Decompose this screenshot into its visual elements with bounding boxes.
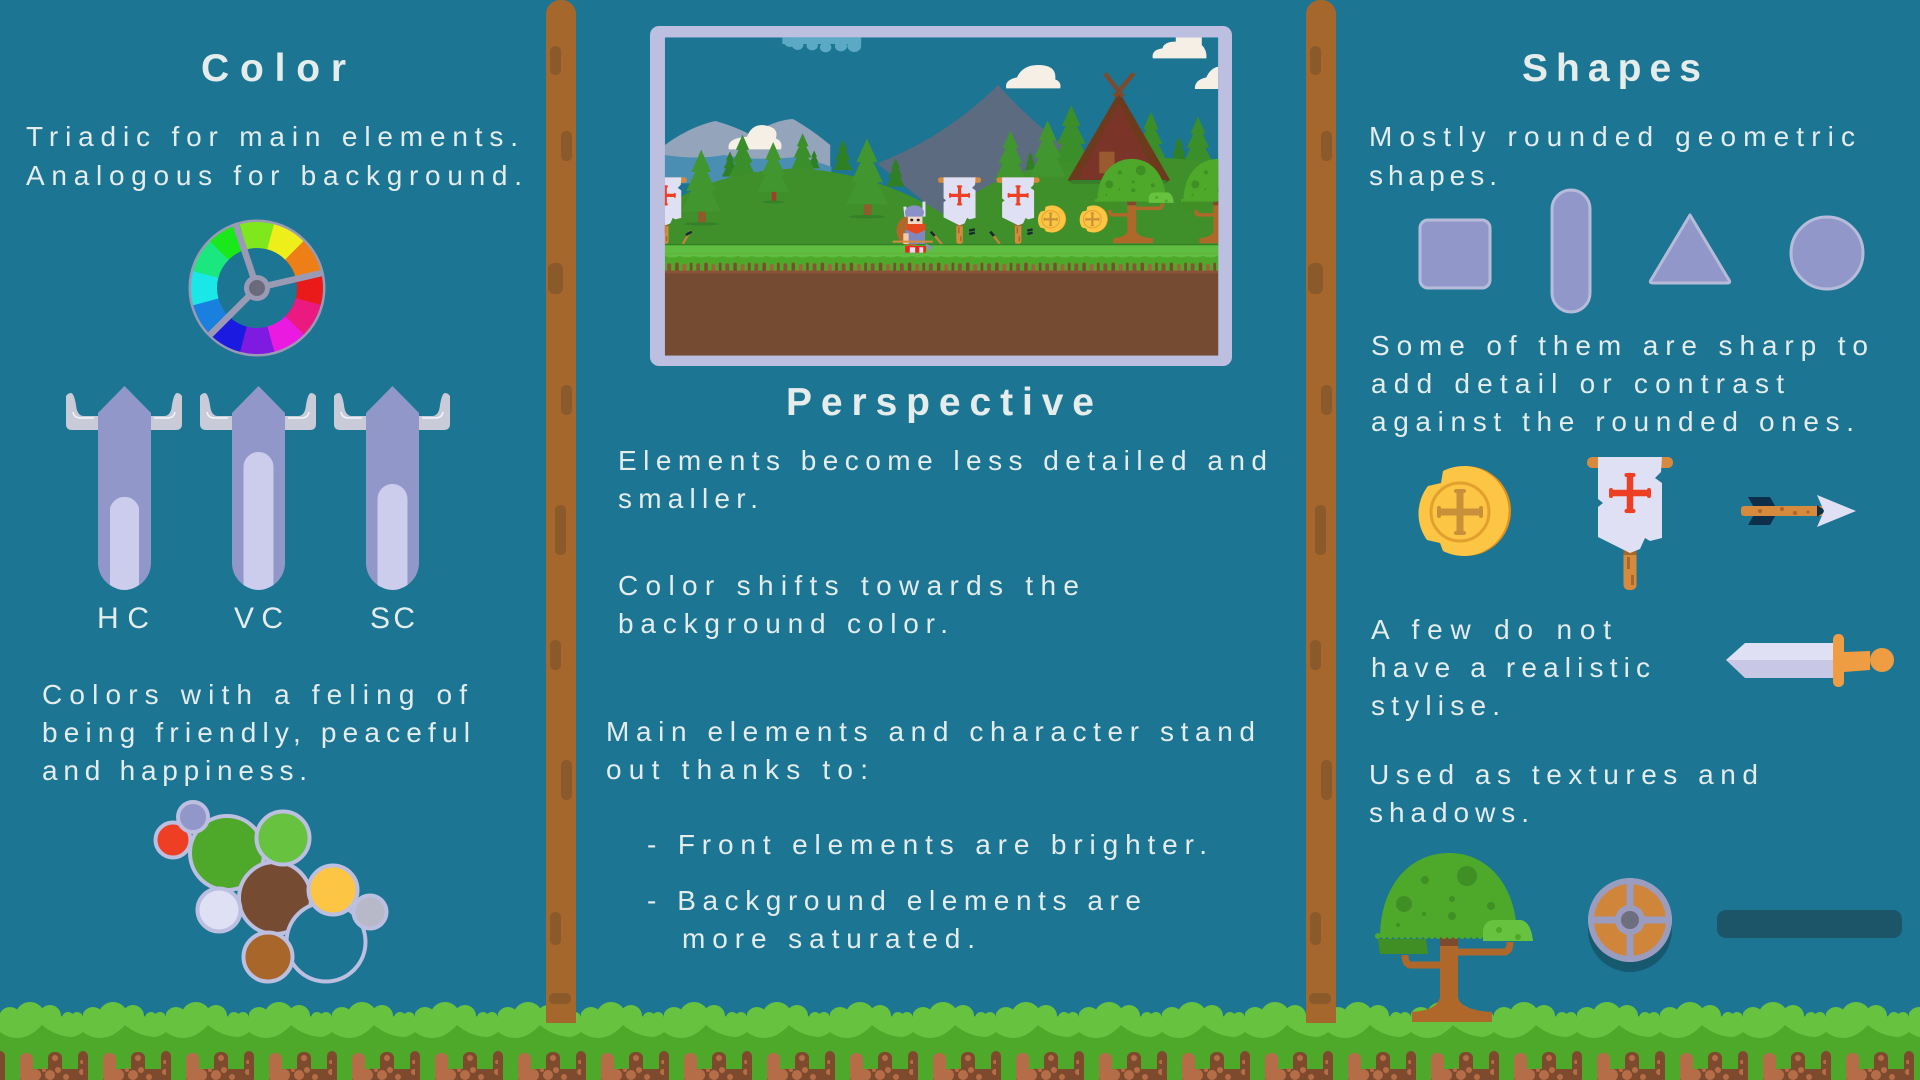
post: right xyxy=(1306,0,1336,1023)
panel: perspective xyxy=(606,26,1267,954)
icons: basic shapes xyxy=(1420,190,1863,312)
text: main elements xyxy=(606,716,1255,785)
text: triadic and analogous: Triadic for main elements. xyxy=(26,121,518,152)
heading: Shapes: Shapes xyxy=(1522,47,1701,90)
shadow bar xyxy=(1717,910,1902,938)
post: left xyxy=(546,0,576,1023)
text: rounded geometric: shapes. xyxy=(1369,160,1497,191)
text: less detailed xyxy=(618,445,1267,514)
text: rounded geometric xyxy=(1369,121,1855,191)
heading: Perspective: Perspective xyxy=(786,381,1094,424)
icon: arrow xyxy=(1741,495,1856,527)
text: main elements: Main elements and character stand xyxy=(606,716,1255,747)
text: color shifts: background color. xyxy=(618,608,948,639)
text: color shifts xyxy=(618,570,1079,639)
icon: coin xyxy=(1418,466,1511,556)
icon: contrast figure SC xyxy=(334,386,450,590)
list: reasons: - Front elements are brighter. xyxy=(647,829,1207,860)
labels: HC VC SC: VC xyxy=(234,602,283,635)
text: main elements: out thanks to: xyxy=(606,754,868,785)
icon: banner xyxy=(1587,457,1673,590)
text: triadic and analogous xyxy=(26,121,522,191)
text: sharp shapes: Some of them are sharp to xyxy=(1371,330,1868,361)
icon: sword xyxy=(1726,634,1894,687)
panel: shapes xyxy=(1369,47,1902,972)
text: not realistic: stylise. xyxy=(1371,690,1500,721)
text: triadic and analogous: Analogous for background. xyxy=(26,160,522,191)
text: textures and shadows: Used as textures and xyxy=(1369,759,1758,790)
text: friendly colors xyxy=(42,679,470,786)
text: textures and shadows: shadows. xyxy=(1369,797,1529,828)
game scene frame xyxy=(644,26,1260,366)
text: friendly colors: being friendly, peaceful xyxy=(42,717,470,748)
chart: color palette circles xyxy=(156,802,386,982)
text: sharp shapes: against the rounded ones. xyxy=(1371,406,1854,437)
list: reasons: more saturated. xyxy=(682,923,975,954)
text: friendly colors: Colors with a feling of xyxy=(42,679,467,710)
labels: HC VC SC xyxy=(97,602,415,635)
icon: tree xyxy=(1378,853,1533,1022)
text: less detailed: Elements become less detailed and xyxy=(618,445,1267,476)
text: friendly colors: and happiness. xyxy=(42,755,307,786)
text: not realistic: A few do not xyxy=(1371,614,1611,645)
icon: contrast figure HC xyxy=(66,386,182,590)
text: rounded geometric: Mostly rounded geometric xyxy=(1369,121,1855,152)
list: reasons xyxy=(647,829,1207,954)
icon: shield xyxy=(1588,878,1672,972)
text: textures and shadows xyxy=(1369,759,1758,828)
ground strip xyxy=(0,1000,1920,1080)
heading: Color: Color xyxy=(201,47,346,90)
text: not realistic: have a realistic xyxy=(1371,652,1650,683)
labels: HC VC SC: HC xyxy=(97,602,149,635)
text: less detailed: smaller. xyxy=(618,483,758,514)
icon: contrast figure VC xyxy=(200,386,316,590)
text: sharp shapes: add detail or contrast xyxy=(1371,368,1784,399)
list: reasons: - Background elements are xyxy=(647,885,1141,916)
text: sharp shapes xyxy=(1371,330,1868,437)
icon: color wheel xyxy=(182,213,332,363)
labels: HC VC SC: SC xyxy=(370,602,415,635)
text: color shifts: Color shifts towards the xyxy=(618,570,1079,601)
text: not realistic xyxy=(1371,614,1650,721)
panel: color xyxy=(26,47,522,982)
